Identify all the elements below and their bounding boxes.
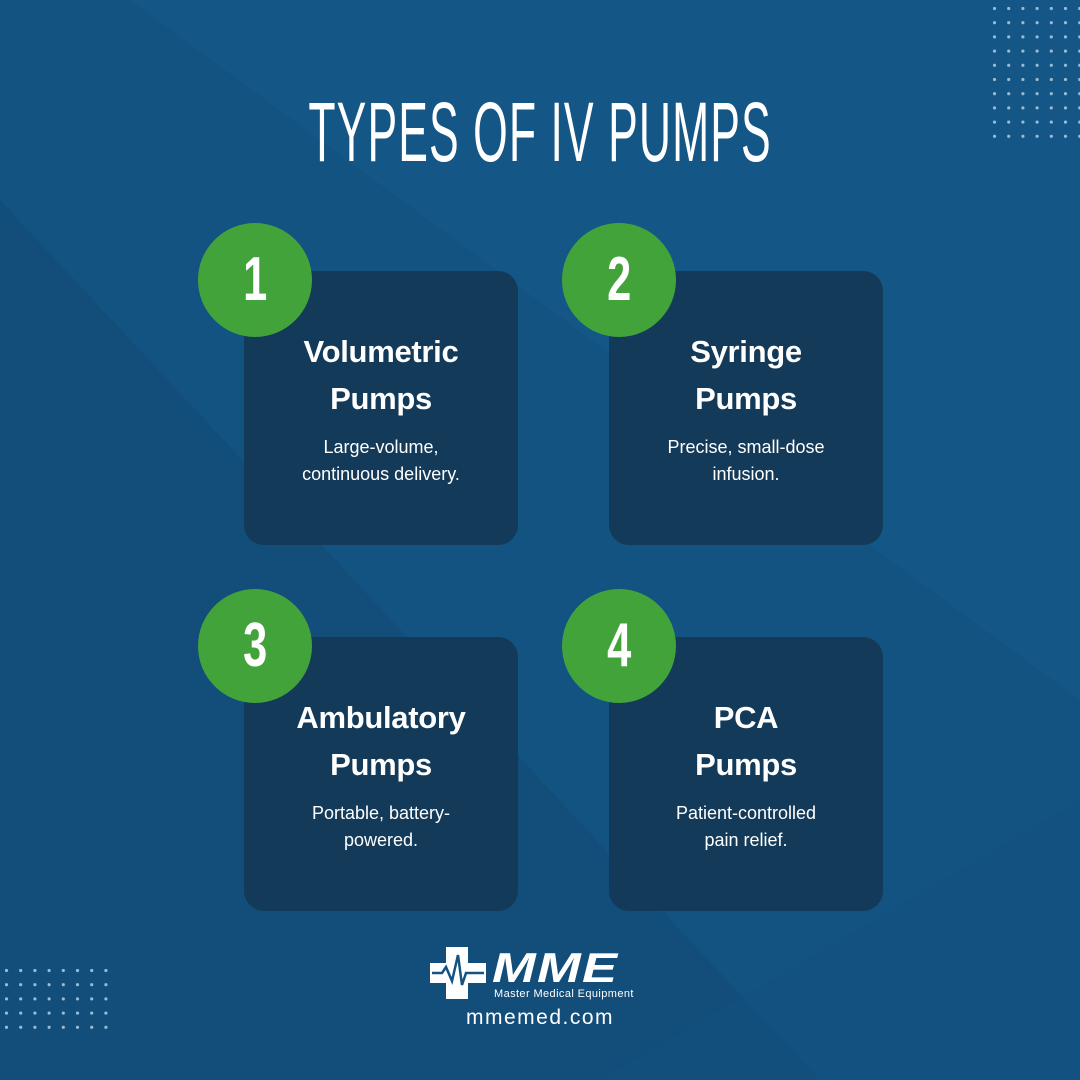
card 1: Large-volume, <box>323 437 439 457</box>
card 4: PCA <box>714 700 778 735</box>
logo <box>430 944 634 1000</box>
card 3: Ambulatory <box>296 700 466 735</box>
badge 3 <box>198 589 312 703</box>
card 2: Pumps <box>695 381 797 416</box>
card 1: continuous delivery. <box>302 464 460 484</box>
card 4: Pumps <box>695 747 797 782</box>
card 2: Syringe <box>690 334 802 369</box>
card 2: Precise, small-dose <box>667 437 825 457</box>
card 1: Pumps <box>330 381 432 416</box>
card 3 <box>244 637 518 911</box>
card 4: Patient-controlled <box>676 803 816 823</box>
url: mmemed.com <box>466 1006 614 1029</box>
logo: Master Medical Equipment <box>494 988 634 1000</box>
badge 3: 3 <box>243 611 267 680</box>
card 4 <box>609 637 883 911</box>
icon: medical cross <box>430 947 486 999</box>
card 1 <box>244 271 518 545</box>
card 2: infusion. <box>712 464 780 484</box>
card 4: pain relief. <box>704 830 788 850</box>
badge 1 <box>198 223 312 337</box>
badge 4: 4 <box>607 611 631 680</box>
badge 4 <box>562 589 676 703</box>
card 3: Pumps <box>330 747 432 782</box>
card 3: powered. <box>344 830 418 850</box>
badge 2 <box>562 223 676 337</box>
dots top right <box>993 7 1080 138</box>
dots bottom left <box>5 969 108 1030</box>
card 2 <box>609 271 883 545</box>
badge 2: 2 <box>607 245 631 314</box>
wordmark: MME <box>492 944 618 991</box>
card 3: Portable, battery- <box>312 803 450 823</box>
card 1: Volumetric <box>304 334 458 369</box>
badge 1: 1 <box>243 245 267 314</box>
title: TYPES OF IV PUMPS <box>308 85 772 179</box>
